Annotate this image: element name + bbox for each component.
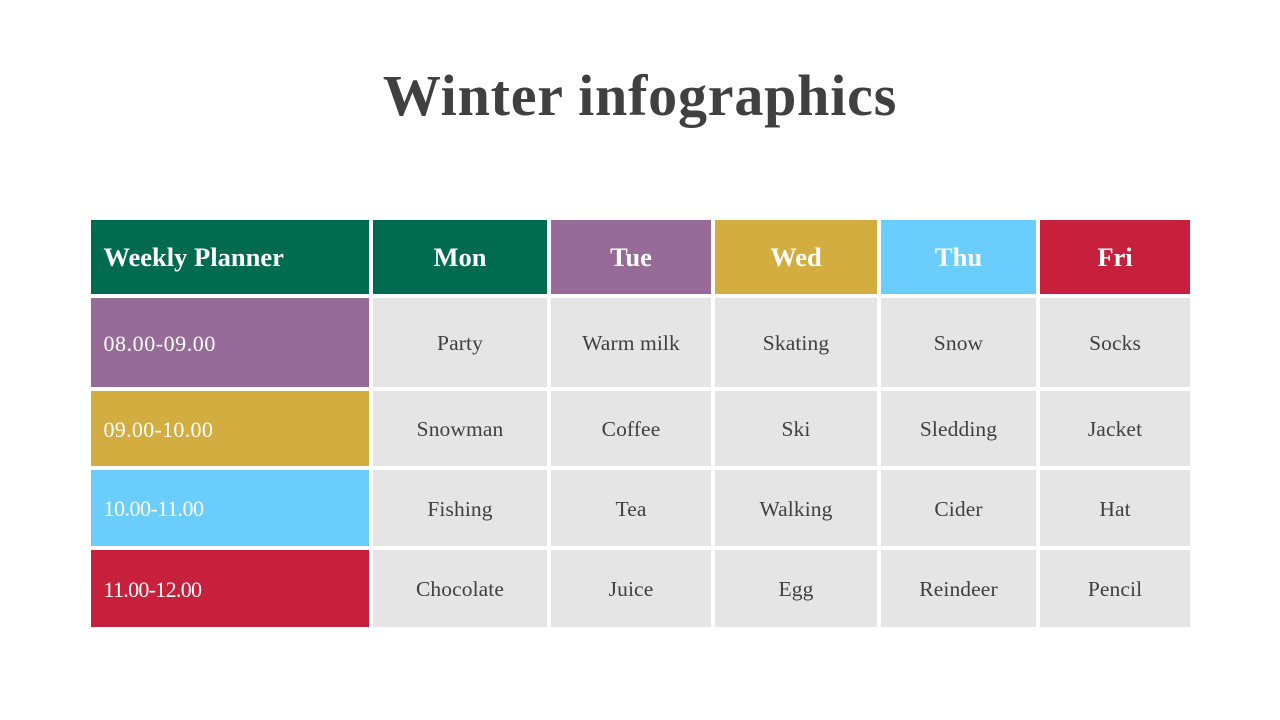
cell: Ski: Ski — [782, 417, 810, 441]
header: Thu: Thu — [935, 242, 982, 272]
cell: Snow: Snow — [934, 331, 983, 355]
cell: Hat: Hat — [1099, 496, 1131, 520]
header: Mon — [373, 220, 547, 294]
cell: Skating — [715, 298, 877, 387]
cell: Walking: Walking — [759, 496, 832, 520]
time: 09.00-10.00: 09.00-10.00 — [104, 416, 213, 442]
cell: Hat — [1040, 470, 1190, 546]
cell: Socks: Socks — [1089, 331, 1141, 355]
title: Winter infographics — [383, 63, 897, 128]
cell: Party: Party — [437, 331, 483, 355]
header: Tue — [551, 220, 711, 294]
header: Mon: Mon — [434, 242, 486, 272]
header: Weekly Planner: Weekly Planner — [104, 242, 284, 272]
cell: Coffee: Coffee — [602, 417, 660, 441]
cell: Juice — [551, 550, 711, 627]
cell: Reindeer: Reindeer — [919, 577, 998, 601]
cell: Party — [373, 298, 547, 387]
cell: Snowman — [373, 391, 547, 466]
cell: Ski — [715, 391, 877, 466]
header: Weekly Planner — [90, 220, 369, 294]
time: 10.00-11.00 — [90, 470, 369, 546]
cell: Egg: Egg — [779, 577, 813, 601]
cell: Tea — [551, 470, 711, 546]
header: Wed — [715, 220, 877, 294]
cell: Cider — [881, 470, 1036, 546]
time: 11.00-12.00: 11.00-12.00 — [104, 576, 201, 602]
cell: Fishing: Fishing — [427, 496, 493, 520]
cell: Jacket — [1040, 391, 1190, 466]
header: Thu — [881, 220, 1036, 294]
header: Fri: Fri — [1097, 242, 1133, 272]
cell: Snowman: Snowman — [417, 417, 503, 441]
cell: Egg — [715, 550, 877, 627]
time: 09.00-10.00 — [90, 391, 369, 466]
cell: Warm milk — [551, 298, 711, 387]
cell: Warm milk: Warm milk — [582, 331, 680, 355]
cell: Snow — [881, 298, 1036, 387]
cell: Socks — [1040, 298, 1190, 387]
time: 10.00-11.00: 10.00-11.00 — [104, 496, 204, 521]
cell: Sledding: Sledding — [920, 417, 997, 441]
cell: Chocolate — [373, 550, 547, 627]
cell: Coffee — [551, 391, 711, 466]
cell: Reindeer — [881, 550, 1036, 627]
cell: Chocolate: Chocolate — [416, 577, 504, 601]
cell: Pencil: Pencil — [1088, 577, 1142, 601]
time: 08.00-09.00: 08.00-09.00 — [104, 330, 216, 356]
time: 11.00-12.00 — [90, 550, 369, 627]
cell: Fishing — [373, 470, 547, 546]
header: Tue: Tue — [610, 242, 652, 272]
cell: Walking — [715, 470, 877, 546]
time: 08.00-09.00 — [90, 298, 369, 387]
cell: Pencil — [1040, 550, 1190, 627]
cell: Tea: Tea — [615, 496, 647, 520]
cell: Jacket: Jacket — [1088, 417, 1142, 441]
cell: Cider: Cider — [934, 496, 983, 520]
cell: Skating: Skating — [763, 331, 829, 355]
header: Fri — [1040, 220, 1190, 294]
cell: Juice: Juice — [609, 577, 653, 601]
header: Wed: Wed — [770, 242, 822, 272]
cell: Sledding — [881, 391, 1036, 466]
